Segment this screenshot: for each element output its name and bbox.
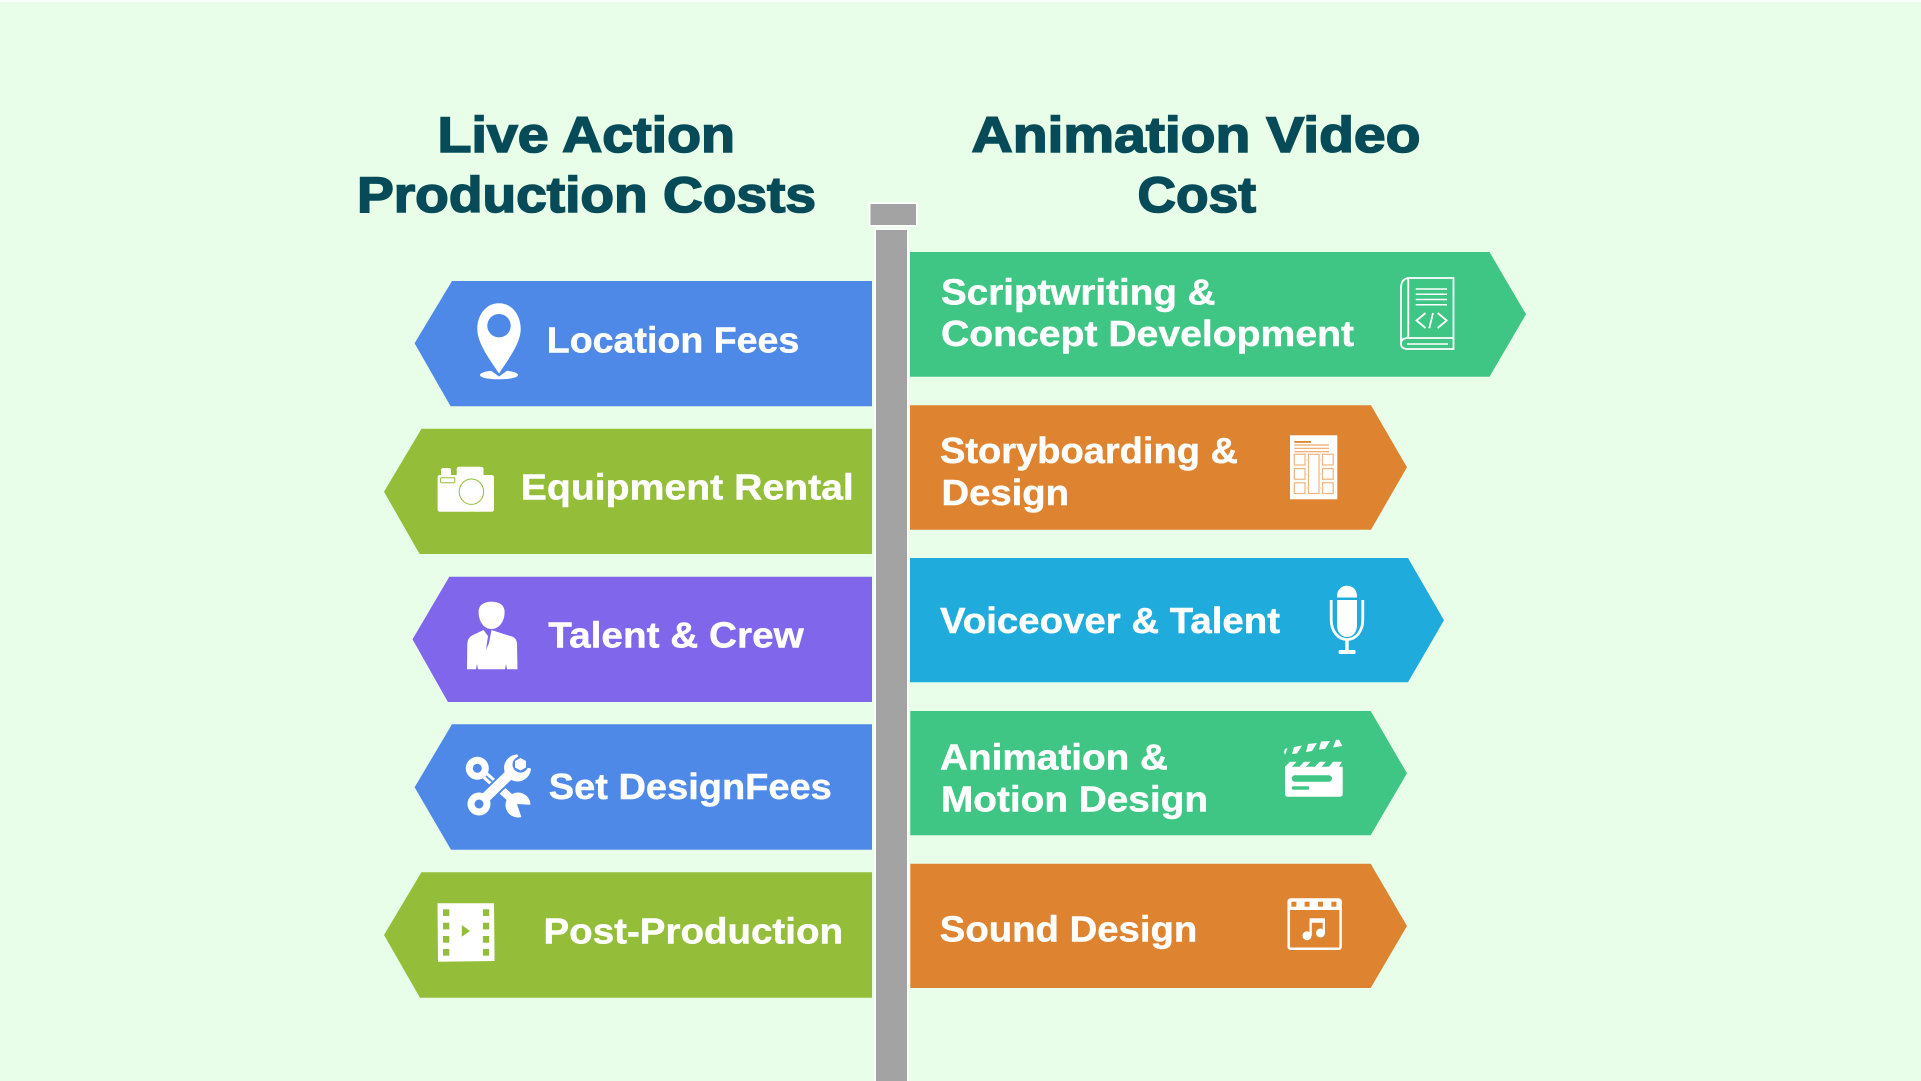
heading: animation video cost (972, 106, 1420, 223)
icon: code book (1401, 278, 1454, 349)
panel: voiceover and talent (910, 558, 1444, 682)
panel: set design fees (415, 724, 872, 850)
icon: storyboard sheet (1290, 435, 1337, 499)
signpost pole (870, 203, 917, 1081)
panel: sound design (910, 864, 1407, 988)
panel: storyboarding and design (910, 405, 1407, 530)
panel: talent and crew: Talent & Crew (548, 614, 805, 656)
panel: scriptwriting and concept development: Concept Development (941, 313, 1354, 354)
heading: animation video cost: Cost (1138, 166, 1256, 223)
panel: post-production (384, 872, 872, 998)
panel: storyboarding and design: Design (942, 472, 1069, 513)
panel: voiceover and talent: Voiceover & Talent (940, 600, 1280, 641)
icon: camera (438, 467, 494, 512)
panel: scriptwriting and concept development (910, 252, 1526, 377)
icon: person in suit (467, 602, 518, 669)
heading: live action production costs (357, 106, 816, 223)
icon: crossed wrenches (466, 751, 534, 822)
panel: talent and crew (412, 577, 872, 702)
panel: storyboarding and design: Storyboarding & (940, 430, 1238, 471)
panel: animation and motion design (910, 711, 1407, 835)
icon: film strip (438, 903, 495, 962)
panel: post-production: Post-Production (544, 910, 843, 952)
panel: sound design: Sound Design (940, 909, 1197, 950)
panel: animation and motion design: Motion Design (941, 779, 1208, 820)
panel: equipment rental (384, 429, 872, 554)
panel: location fees (415, 281, 872, 406)
panel: equipment rental: Equipment Rental (521, 466, 854, 508)
icon: music player window (1288, 899, 1341, 949)
panel: scriptwriting and concept development: Scriptwriting & (941, 271, 1216, 312)
heading: live action production costs: Live Action (438, 106, 735, 163)
icon: clapperboard (1284, 740, 1343, 797)
panel: location fees: Location Fees (547, 320, 799, 360)
icon: map pin (477, 303, 521, 379)
panel: set design fees: Set DesignFees (549, 766, 832, 807)
panel: animation and motion design: Animation & (940, 737, 1168, 778)
heading: animation video cost: Animation Video (972, 106, 1420, 163)
icon: microphone (1331, 586, 1363, 654)
heading: live action production costs: Production Costs (357, 166, 816, 223)
